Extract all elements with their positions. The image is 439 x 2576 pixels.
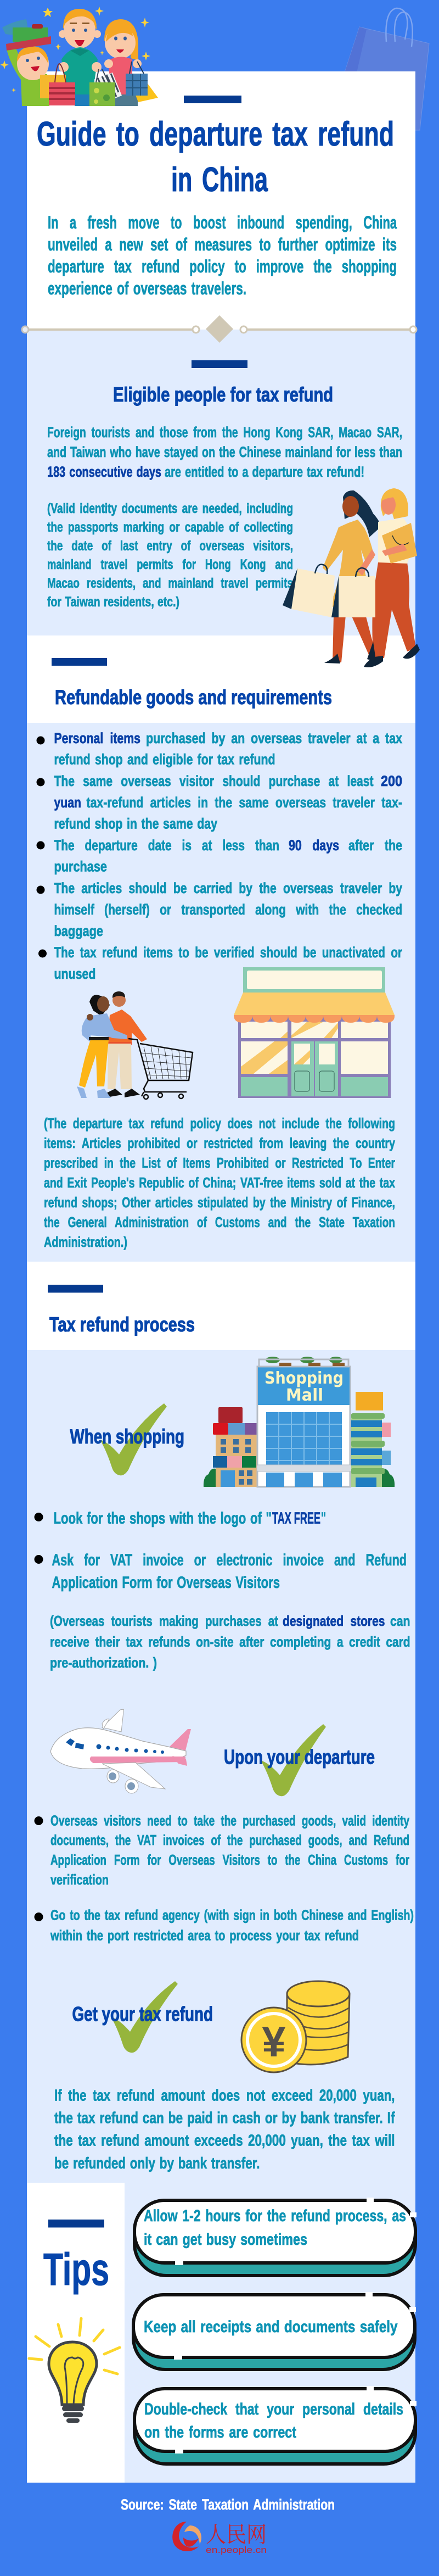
text: designated stores note: (Overseas tourists making purchases at: [50, 1613, 278, 1629]
woman two tote bag: [382, 523, 417, 564]
divider with diamond: [22, 315, 417, 343]
intro paragraph: experience of overseas travelers.: [48, 278, 246, 298]
text: refund amount rule: be refunded only by bank transfer.: [54, 2155, 260, 2172]
hair woman one: [343, 490, 380, 537]
source line: Source: State Taxation Administration: [121, 2496, 335, 2513]
heading: get your tax refund: Get your tax refund: [72, 2003, 213, 2026]
icon: shopping bag backdrop: [344, 8, 429, 130]
woman two torso: [378, 518, 413, 564]
text: designated stores note: [50, 1613, 410, 1671]
bullet: customs verification: [34, 1813, 409, 1888]
text: designated stores note: pre-authorization. ): [50, 1654, 157, 1671]
bullet list: requirements: yuan: [54, 794, 81, 811]
stars: [0, 7, 150, 92]
text: valid identity note: the passports marking or capable of collecting: [47, 520, 293, 535]
illustration: couple with shopping cart: [77, 991, 193, 1099]
text: valid identity note: for Taiwan residents, etc.): [47, 594, 179, 610]
cockpit and cabin windows: [66, 1738, 164, 1754]
woman's shoes: [77, 1086, 87, 1098]
illustration: shopping family: [0, 7, 158, 106]
bullet list: requirements: 90 days: [289, 837, 339, 854]
bushes: [204, 1469, 216, 1487]
arm: [382, 544, 407, 556]
base panels: [241, 1077, 288, 1096]
bar: eligible accent: [192, 360, 247, 368]
bullet list: requirements: Personal items: [54, 730, 140, 746]
bullet: tax refund agency: within the port restricted area to process your tax refund: [50, 1927, 359, 1943]
bullet list: requirements: purchase: [54, 858, 107, 874]
text: valid identity note: Macao residents, and mainland travel permits: [47, 576, 293, 591]
mall canopy: [257, 1465, 352, 1471]
bags: [40, 75, 66, 98]
bar: intro accent: [184, 96, 241, 103]
bullet: VAT invoice: [34, 1551, 407, 1592]
left signs: [218, 1407, 243, 1423]
woman one legs: [333, 615, 346, 662]
shop sign: [243, 967, 385, 993]
pill: tip one: [134, 2198, 417, 2276]
cart: [128, 1039, 193, 1099]
panel: refundable goods background: [27, 723, 415, 1262]
title: in China: [171, 161, 268, 199]
icon: check mark upon departure: [261, 1724, 326, 1796]
shop body: [238, 1015, 391, 1098]
icon: check mark get refund: [111, 1981, 178, 2053]
mall name: Shopping: [264, 1369, 344, 1388]
yuan symbol: ¥: [262, 2017, 286, 2066]
pill: tip three: [134, 2386, 417, 2464]
mall windows: [266, 1412, 342, 1465]
boy: [7, 47, 49, 106]
bullets: [36, 736, 47, 958]
bar: refundable accent: [52, 658, 107, 666]
bullet list: requirements: refund shop and eligible for tax refund: [54, 751, 275, 768]
doors: [291, 1041, 314, 1096]
bullet list: requirements: after the: [348, 837, 402, 854]
pill: tip three: on the forms are correct: [144, 2423, 296, 2441]
rooftop planters: [259, 1357, 348, 1367]
bullet: tax free shops: TAX FREE: [272, 1509, 320, 1527]
text: exclusions note: Administration.): [44, 1234, 127, 1250]
text: eligibility: [47, 424, 402, 480]
illustration: two women shopping: [283, 488, 420, 667]
mall ground floor: [266, 1473, 284, 1487]
heading: refundable goods: Refundable goods and requirements: [55, 686, 332, 709]
heading: tips: Tips: [43, 2244, 109, 2295]
text: eligibility: are entitled to a departure tax refund!: [165, 464, 364, 480]
panel: tips side background: [27, 2183, 125, 2483]
woman two legs: [372, 562, 416, 658]
heading: eligible people: Eligible people for tax refund: [113, 383, 333, 406]
illustration: airplane: [50, 1709, 191, 1793]
heading: tax refund process: Tax refund process: [49, 1313, 195, 1336]
text: designated stores note: designated stores: [283, 1613, 385, 1629]
bar: process accent: [48, 1285, 103, 1293]
bullet list: requirements: The departure date is at less than: [54, 837, 279, 854]
logo: people.cn: [172, 2517, 267, 2555]
gift and hat on boy's head: [2, 19, 29, 35]
title: [37, 115, 394, 199]
illustration: shopping mall: [204, 1357, 395, 1487]
bullet list: requirements: unused: [54, 966, 95, 982]
panel: process heading background: [27, 1262, 415, 1350]
bullet: tax free shops: ": [321, 1509, 326, 1527]
icon: light bulb: [29, 2318, 120, 2423]
woman one head: [342, 496, 359, 517]
lower wing: [102, 1763, 165, 1789]
logo: people.cn: 人民网: [206, 2517, 267, 2549]
intro paragraph: [48, 213, 397, 298]
icon: check mark when shopping: [100, 1403, 167, 1475]
shopping bags: [283, 568, 300, 609]
woman: [89, 995, 110, 1016]
illustration: yuan coin stack: [241, 1981, 350, 2072]
bullet: tax refund agency: [34, 1907, 414, 1943]
text: refund amount rule: [54, 2087, 395, 2172]
illustration: shop front: [234, 967, 395, 1098]
text: designated stores note: can: [390, 1613, 410, 1629]
text: exclusions note: [44, 1115, 395, 1250]
panel: process background: [27, 1350, 415, 2483]
mother: [104, 19, 138, 60]
man's shoes: [106, 1089, 122, 1097]
text: eligibility: 183 consecutive days: [47, 464, 161, 480]
panel: eligible people background: [27, 330, 415, 635]
man head and torso: [112, 994, 126, 1007]
bullet: tax free shops: Look for the shops with the logo of ": [54, 1509, 272, 1527]
text: valid identity note: mainland travel permits for Hong Kong and: [47, 557, 293, 572]
father: [63, 9, 97, 33]
text: valid identity note: the date of last entry of overseas visitors,: [47, 538, 293, 554]
bullet list: requirements: 200: [381, 773, 402, 789]
bullet: customs verification: verification: [50, 1871, 109, 1888]
dress: [323, 520, 374, 610]
shoes: [324, 654, 340, 663]
bullet list: requirements: baggage: [54, 923, 103, 939]
main building: [257, 1367, 350, 1487]
panel: refundable heading background: [27, 635, 415, 723]
mall name: [264, 1369, 344, 1405]
awning: [234, 993, 395, 1015]
right building: [351, 1414, 382, 1487]
arms: [59, 62, 69, 72]
bullet list: requirements: [36, 730, 402, 982]
pill: tip one: it can get busy sometimes: [144, 2231, 307, 2249]
panel: intro background: [27, 71, 415, 330]
mall name: Mall: [286, 1386, 323, 1405]
text: valid identity note: [47, 501, 293, 610]
heading: upon your departure: Upon your departure: [224, 1746, 375, 1769]
pill: tip two: [133, 2292, 416, 2369]
bullet: VAT invoice: Application Form for Overseas Visitors: [52, 1574, 280, 1592]
logo: people.cn: en.people.cn: [206, 2545, 267, 2555]
text: valid identity note: (Valid identity documents are needed, including: [47, 501, 293, 516]
bullet list: requirements: refund shop in the same day: [54, 815, 217, 832]
engines: [107, 1770, 138, 1793]
blonde hair: [381, 488, 408, 519]
left building: [216, 1434, 257, 1487]
heading: when shopping: When shopping: [70, 1425, 184, 1448]
bar: tips accent: [48, 2220, 104, 2228]
